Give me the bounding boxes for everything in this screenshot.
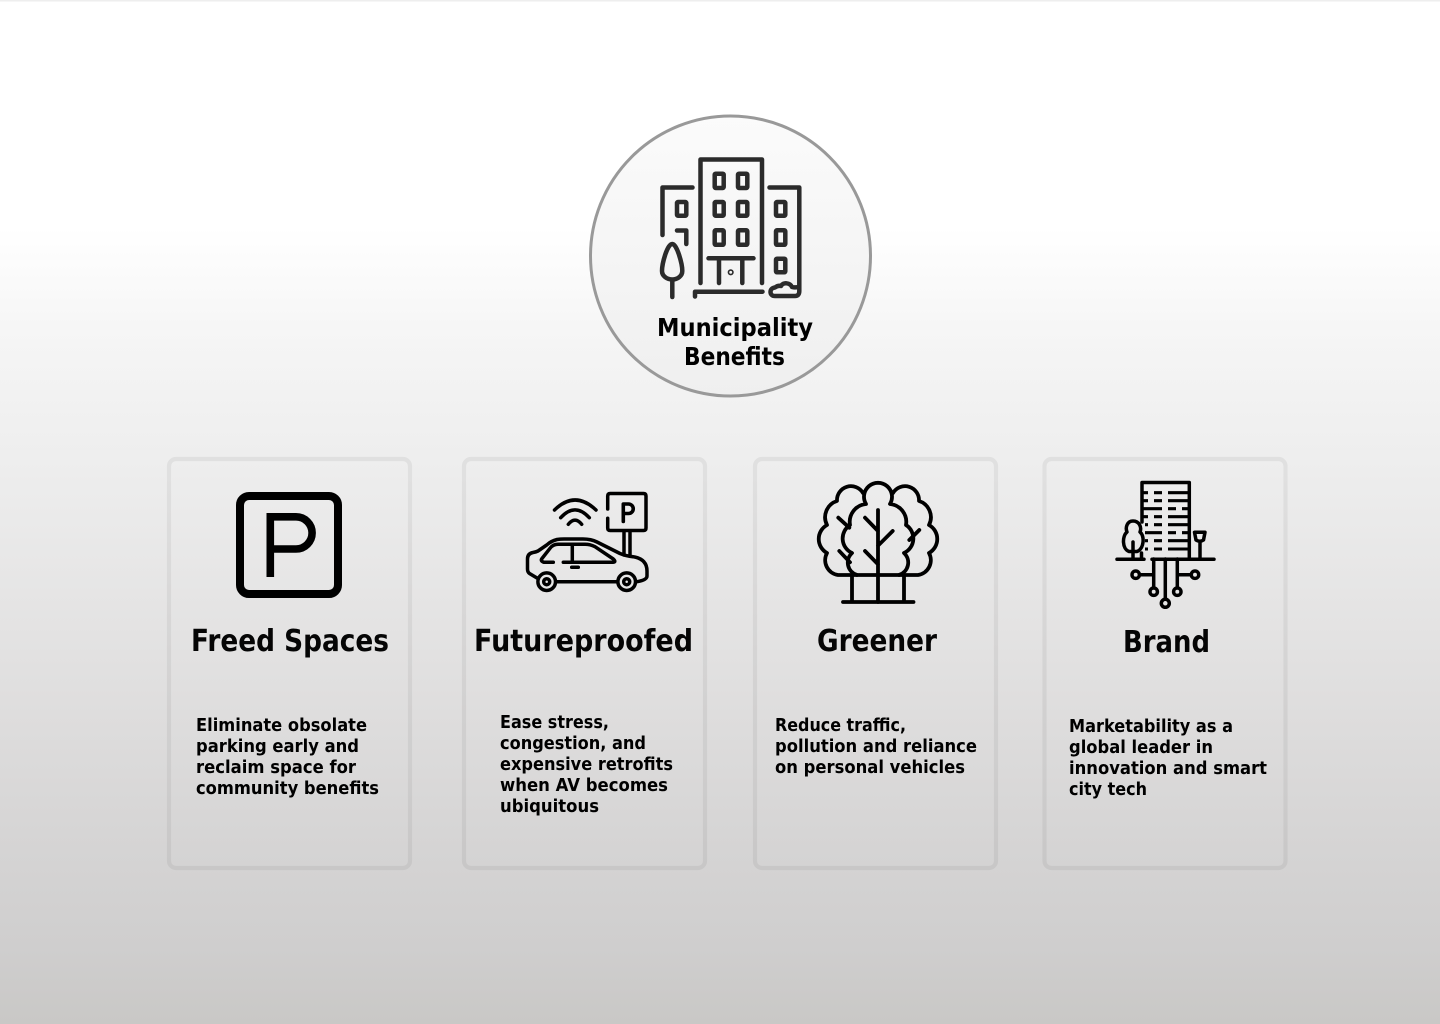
card frame [755,459,996,868]
description: congestion, and [500,734,646,754]
description: Reduce traffic, [775,716,906,736]
heading: Brand [1123,625,1210,660]
icon: smart city building [1117,482,1214,607]
badge circle [590,116,870,396]
description: ubiquitous [500,797,599,817]
description: Marketability as a [1069,717,1233,737]
icon: trees [819,483,937,602]
heading: Greener [817,624,937,659]
description [775,716,977,778]
description [1069,717,1267,800]
description: parking early and [196,737,359,757]
panel: municipality benefits badge [590,116,870,396]
panel: futureproofed [464,459,705,868]
description: Ease stress, [500,713,609,733]
card frame [1044,459,1286,868]
icon: parking sign [240,496,338,594]
description: reclaim space for [196,758,356,778]
panel: greener [755,459,996,868]
badge heading: Benefits [684,342,785,371]
description: community benefits [196,779,379,799]
description: expensive retrofits [500,755,673,775]
description: on personal vehicles [775,758,965,778]
icon: connected car and parking sign [528,494,647,590]
badge heading [657,313,813,371]
description [500,713,673,817]
description: innovation and smart [1069,759,1267,779]
card frame [169,459,410,868]
panel: freed spaces [169,459,410,868]
description: pollution and reliance [775,737,977,757]
description [196,716,379,799]
description: when AV becomes [500,776,668,796]
heading: Freed Spaces [191,624,389,659]
panel: brand [1044,459,1286,868]
description: global leader in [1069,738,1213,758]
heading: Futureproofed [474,624,693,659]
icon: city buildings [662,160,799,297]
badge heading: Municipality [657,313,813,342]
description: Eliminate obsolate [196,716,367,736]
description: city tech [1069,780,1147,800]
card frame [464,459,705,868]
